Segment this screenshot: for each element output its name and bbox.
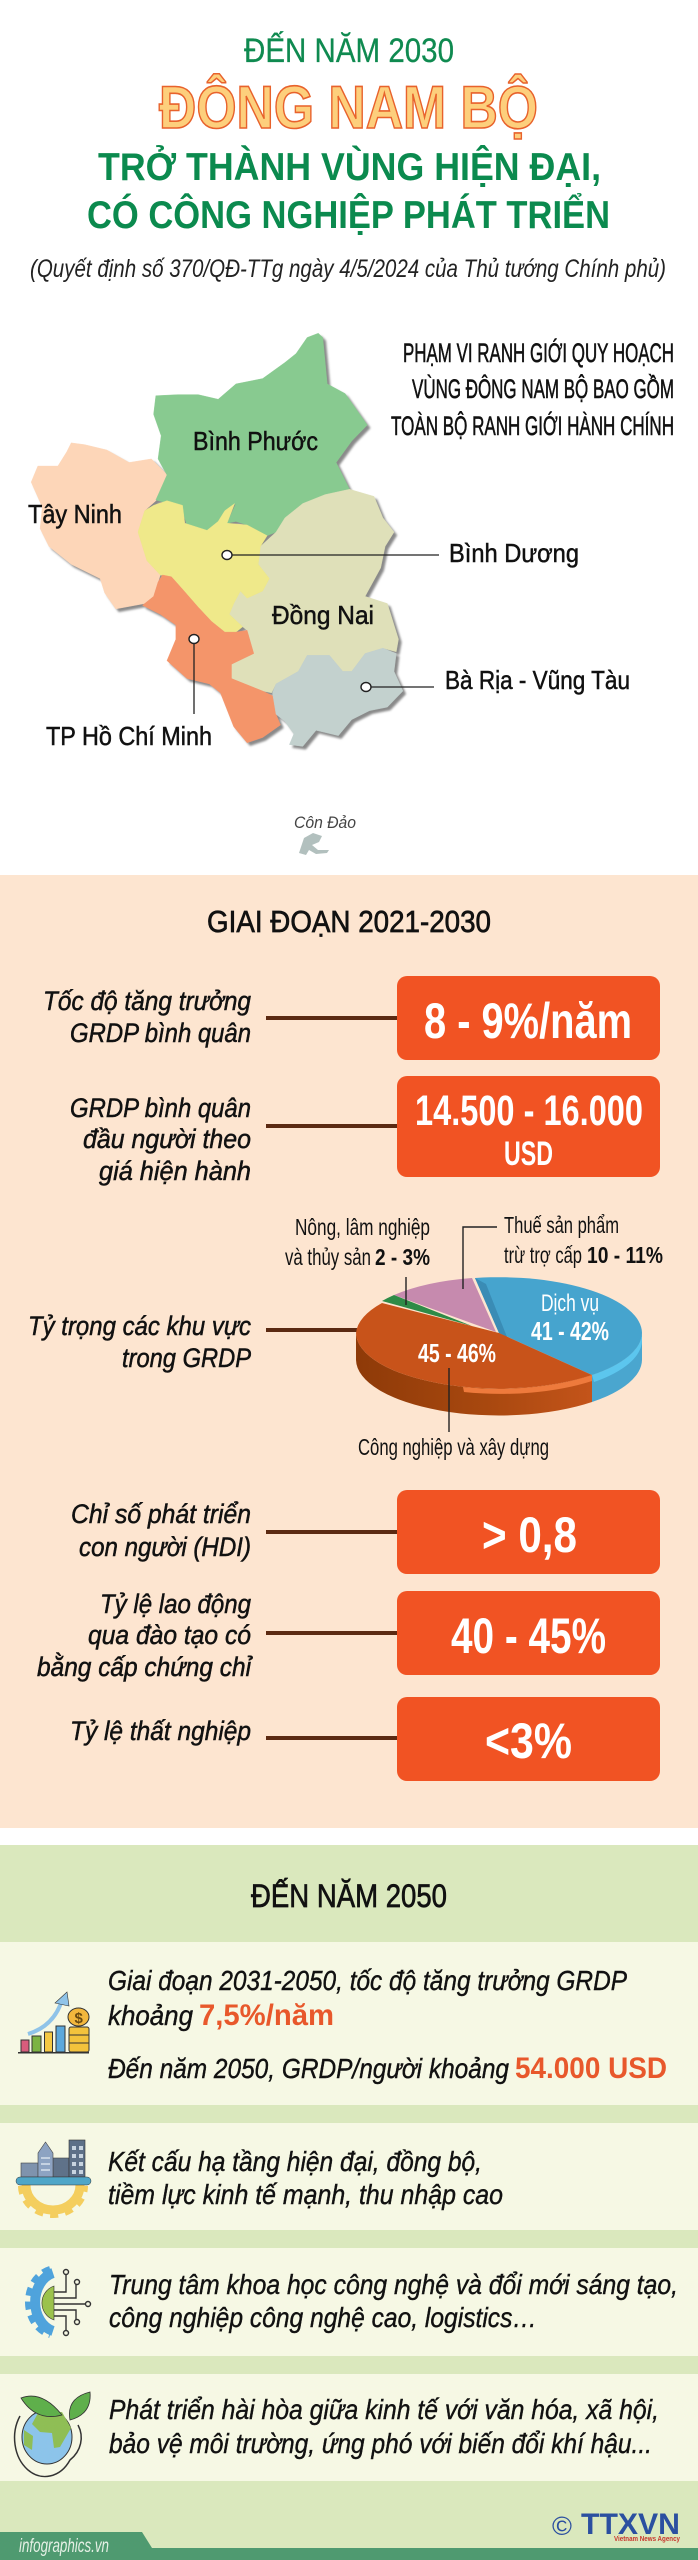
label: Bình Phước: Bình Phước xyxy=(193,426,318,456)
row: GRDP per capita: GRDP bình quân xyxy=(70,1093,251,1123)
text: science and technology xyxy=(109,2269,678,2333)
pie slice: agriculture xyxy=(382,1295,472,1326)
heading: period 2021-2030: GIAI ĐOẠN 2021-2030 xyxy=(207,904,491,939)
leader: TP Hồ Chí Minh xyxy=(189,634,199,714)
title: line 1: TRỞ THÀNH VÙNG HIỆN ĐẠI, xyxy=(98,145,601,189)
row: trained labour: bằng cấp chứng chỉ xyxy=(37,1651,253,1682)
province: Bình Dương xyxy=(138,501,269,632)
icon: gear with circuit xyxy=(28,2269,91,2336)
text: GRDP per capita: Đến năm 2050, GRDP/người khoảng xyxy=(108,2053,509,2084)
row: GRDP per capita: đầu người theo xyxy=(83,1124,251,1154)
band: infrastructure xyxy=(0,2123,698,2230)
text: growth rate: khoảng xyxy=(108,2000,193,2031)
pie label: taxes: 10 - 11% xyxy=(587,1242,663,1268)
pie value: services xyxy=(531,1290,609,1346)
icon: growth chart with coins xyxy=(18,1992,89,2054)
pie side: services xyxy=(592,1333,642,1402)
band: sustainable development xyxy=(0,2374,698,2481)
icon: growth chart with coins: $ xyxy=(74,2010,84,2027)
text: infrastructure: Kết cấu hạ tầng hiện đại, đồng bộ, xyxy=(108,2146,482,2177)
label: Côn Đảo: Côn Đảo xyxy=(294,813,356,832)
title: region name: ĐÔNG NAM BỘ xyxy=(159,74,538,141)
label: Đồng Nai: Đồng Nai xyxy=(272,600,374,630)
province: Đồng Nai xyxy=(229,489,398,693)
province: Bình Phước xyxy=(154,333,367,536)
row: GRDP structure xyxy=(28,1311,358,1373)
row: GRDP per capita xyxy=(70,1076,660,1186)
footer: site name: infographics.vn xyxy=(19,2536,109,2557)
text: infrastructure xyxy=(108,2146,503,2210)
row: GRDP structure: Tỷ trọng các khu vực xyxy=(28,1311,251,1341)
text: growth rate xyxy=(108,1965,627,2032)
pie label: taxes: trừ trợ cấp xyxy=(504,1242,582,1268)
band: science and technology xyxy=(0,2248,698,2356)
band: growth and GRDP per capita xyxy=(0,1942,698,2105)
row: trained labour: 40 - 45% xyxy=(451,1608,606,1664)
row: HDI xyxy=(71,1490,660,1574)
logo: TTXVN: © xyxy=(552,2511,572,2541)
label: Bình Dương: Bình Dương xyxy=(449,538,579,568)
row: GRDP structure: trong GRDP xyxy=(122,1343,251,1373)
province: Bà Rịa - Vũng Tàu xyxy=(272,648,403,746)
row: GRDP growth: Tốc độ tăng trưởng xyxy=(43,986,251,1016)
pie chart: GRDP structure xyxy=(285,1212,663,1460)
footer band with source tab xyxy=(0,2532,698,2560)
text: sustainable development xyxy=(109,2394,659,2459)
pie slice: taxes xyxy=(394,1278,496,1332)
icon: globe with leaves xyxy=(15,2392,90,2477)
logo: TTXVN: TTXVN xyxy=(581,2508,680,2541)
pie rim highlights xyxy=(592,1333,642,1382)
pie label: agriculture xyxy=(285,1214,430,1270)
pie value: services: 41 - 42% xyxy=(531,1316,609,1346)
row: GRDP growth: GRDP bình quân xyxy=(70,1018,251,1048)
pie label: taxes: Thuế sản phẩm xyxy=(504,1212,619,1238)
pie side: industry xyxy=(356,1333,592,1415)
title block xyxy=(30,32,666,283)
icon: Côn Đảo island xyxy=(299,833,329,855)
pie label: agriculture: 2 - 3% xyxy=(375,1244,430,1270)
pie slice: services xyxy=(475,1277,642,1375)
row: GRDP growth xyxy=(43,976,660,1060)
row: GRDP per capita: USD xyxy=(504,1135,553,1173)
heading: to 2050: ĐẾN NĂM 2050 xyxy=(251,1878,447,1914)
text: science and technology: công nghiệp công nghệ cao, logistics… xyxy=(109,2302,537,2333)
leaders xyxy=(406,1227,497,1432)
pie label: agriculture: và thủy sản xyxy=(285,1244,371,1270)
map shapes xyxy=(31,333,403,746)
pie label: industry: Công nghiệp và xây dựng xyxy=(358,1434,549,1460)
leader: Bình Dương xyxy=(222,550,439,560)
row: unemployment xyxy=(70,1697,660,1781)
province: Tây Ninh xyxy=(31,443,169,609)
row: GRDP per capita: giá hiện hành xyxy=(99,1156,251,1186)
label: TP Hồ Chí Minh: TP Hồ Chí Minh xyxy=(46,721,212,751)
pie slice: industry xyxy=(356,1303,592,1388)
map of the Southeast region xyxy=(28,333,630,855)
row: HDI: > 0,8 xyxy=(482,1507,577,1563)
row: trained labour: Tỷ lệ lao động xyxy=(100,1589,251,1619)
icon: city on gear xyxy=(16,2140,91,2215)
row: GRDP growth: 8 - 9%/năm xyxy=(424,993,632,1049)
pie value: industry: 45 - 46% xyxy=(418,1338,496,1368)
text: growth rate: 7,5%/năm xyxy=(199,1999,334,2032)
text: growth rate: Giai đoạn 2031-2050, tốc độ tăng trưởng GRDP xyxy=(108,1965,627,1996)
row: trained labour: qua đào tạo có xyxy=(88,1620,251,1650)
label: Bà Rịa - Vũng Tàu: Bà Rịa - Vũng Tàu xyxy=(445,665,630,695)
pie value: services: Dịch vụ xyxy=(541,1290,599,1317)
row: trained labour xyxy=(37,1589,660,1682)
province: TP Hồ Chí Minh xyxy=(142,575,280,743)
text: GRDP per capita: 54.000 USD xyxy=(515,2052,667,2085)
pie label: taxes xyxy=(504,1212,663,1268)
logo: TTXVN: Vietnam News Agency xyxy=(614,2536,680,2543)
pie label: agriculture: Nông, lâm nghiệp xyxy=(295,1214,430,1240)
panel: period 2021-2030 xyxy=(0,875,698,1828)
row: HDI: con người (HDI) xyxy=(79,1532,251,1562)
row: HDI: Chỉ số phát triển xyxy=(71,1499,251,1529)
title: year: ĐẾN NĂM 2030 xyxy=(244,32,454,70)
label: Tây Ninh: Tây Ninh xyxy=(28,499,122,529)
map note xyxy=(391,337,674,441)
title: line 2: CÓ CÔNG NGHIỆP PHÁT TRIỂN xyxy=(87,192,610,237)
row: unemployment: Tỷ lệ thất nghiệp xyxy=(70,1716,251,1746)
panel: to 2050 xyxy=(0,1845,698,2560)
row: unemployment: <3% xyxy=(485,1713,572,1769)
leader: Bà Rịa - Vũng Tàu xyxy=(361,682,434,692)
text: infrastructure: tiềm lực kinh tế mạnh, thu nhập cao xyxy=(108,2179,503,2210)
